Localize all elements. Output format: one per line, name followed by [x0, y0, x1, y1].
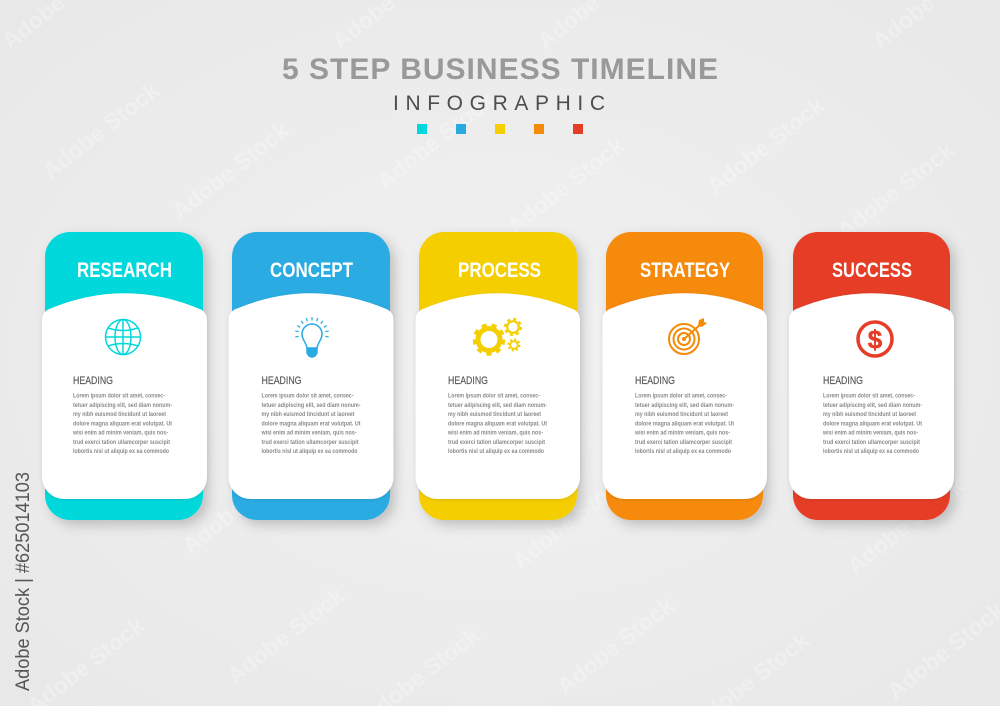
text: Adobe Stock — [177, 452, 304, 559]
text block: research: my nibh euismod tincidunt ut laoreet — [73, 411, 167, 418]
text: Adobe Stock — [167, 117, 294, 224]
text: Adobe Stock — [372, 87, 499, 194]
text: Adobe Stock — [702, 92, 829, 199]
heading: strategy: STRATEGY — [640, 259, 730, 282]
text block: success — [822, 375, 923, 455]
text block: research: HEADING — [73, 375, 113, 387]
text block: success: trud exerci tation ullamcorper suscipit — [823, 439, 921, 446]
text block: research: dolore magna aliquam erat volutpat. Ut — [73, 420, 173, 428]
text block: process — [447, 375, 548, 455]
stock id side text: Adobe Stock | #625014103 — [13, 472, 34, 691]
text block: success: my nibh euismod tincidunt ut laoreet — [823, 411, 917, 418]
panel: research — [42, 232, 207, 520]
text block: concept: tetuer adipiscing elit, sed diam nonum- — [262, 402, 360, 409]
text: Adobe Stock — [507, 467, 634, 574]
text block: concept: dolore magna aliquam erat volutpat. Ut — [262, 420, 361, 428]
text block: research: Lorem ipsum dolor sit amet, consec- — [73, 392, 165, 400]
text block: strategy: my nibh euismod tincidunt ut laoreet — [635, 411, 729, 418]
panel: strategy — [602, 232, 767, 520]
legend colour squares — [417, 124, 583, 134]
panel: concept — [228, 232, 394, 520]
text block: strategy: dolore magna aliquam erat volutpat. Ut — [635, 420, 735, 428]
text block: concept: my nibh euismod tincidunt ut laoreet — [262, 411, 355, 418]
text block: research: tetuer adipiscing elit, sed diam nonum- — [73, 402, 172, 409]
panel: success — [789, 232, 954, 520]
icon: dollar coin: $ — [868, 324, 883, 354]
text block: concept: wisi enim ad minim veniam, quis nos- — [261, 430, 356, 436]
text block: process: Lorem ipsum dolor sit amet, consec- — [448, 392, 540, 400]
text: Adobe Stock — [832, 137, 959, 244]
text block: process: my nibh euismod tincidunt ut laoreet — [448, 411, 542, 418]
text block: strategy: lobortis nisl ut aliquip ex ea commodo — [635, 448, 731, 455]
text block: strategy — [634, 375, 735, 455]
text block: process: wisi enim ad minim veniam, quis nos- — [447, 430, 543, 436]
text block: concept: Lorem ipsum dolor sit amet, consec- — [262, 392, 354, 400]
text block: success: wisi enim ad minim veniam, quis nos- — [822, 430, 918, 436]
text block: strategy: Lorem ipsum dolor sit amet, consec- — [635, 392, 727, 400]
text block: process: lobortis nisl ut aliquip ex ea commodo — [448, 448, 544, 455]
text block: strategy: trud exerci tation ullamcorper suscipit — [635, 439, 733, 446]
text: Adobe Stock — [502, 132, 629, 239]
text block: success: dolore magna aliquam erat volutpat. Ut — [823, 420, 923, 428]
text block: strategy: wisi enim ad minim veniam, quis nos- — [634, 430, 730, 436]
text block: concept: trud exerci tation ullamcorper suscipit — [262, 439, 359, 446]
heading: success: SUCCESS — [832, 259, 912, 282]
text block: process: HEADING — [448, 375, 488, 387]
text block: process: tetuer adipiscing elit, sed diam nonum- — [448, 402, 547, 409]
text block: concept: lobortis nisl ut aliquip ex ea commodo — [262, 448, 358, 455]
icon: dollar coin — [858, 322, 892, 356]
text block: research: wisi enim ad minim veniam, quis nos- — [72, 430, 168, 436]
heading: research: RESEARCH — [77, 259, 172, 282]
text block: strategy: HEADING — [635, 375, 675, 387]
text block: research: lobortis nisl ut aliquip ex ea commodo — [73, 448, 169, 455]
icon: globe — [106, 320, 140, 354]
icon: light bulb — [295, 317, 329, 357]
heading: concept: CONCEPT — [270, 259, 353, 282]
text block: strategy: tetuer adipiscing elit, sed diam nonum- — [635, 402, 734, 409]
panel: process — [416, 232, 580, 520]
subtitle: INFOGRAPHIC — [393, 92, 605, 115]
text: Adobe Stock — [842, 472, 969, 579]
text block: concept: HEADING — [262, 375, 302, 387]
text: Adobe Stock — [552, 592, 679, 699]
icon: target — [669, 318, 707, 354]
text block: process: dolore magna aliquam erat volutpat. Ut — [448, 420, 548, 428]
text: Adobe Stock — [37, 77, 164, 184]
text block: process: trud exerci tation ullamcorper suscipit — [448, 439, 546, 446]
heading: process: PROCESS — [458, 259, 541, 282]
text block: success: tetuer adipiscing elit, sed diam nonum- — [823, 402, 922, 409]
text: Adobe Stock — [222, 582, 349, 689]
title: 5 STEP BUSINESS TIMELINE — [282, 53, 718, 86]
text block: success: Lorem ipsum dolor sit amet, consec- — [823, 392, 915, 400]
text block: research — [72, 375, 173, 455]
text block: success: lobortis nisl ut aliquip ex ea commodo — [823, 448, 919, 455]
text block: concept — [261, 375, 361, 455]
text block: research: trud exerci tation ullamcorper suscipit — [73, 439, 171, 446]
text block: success: HEADING — [823, 375, 863, 387]
icon: gears — [474, 319, 521, 354]
